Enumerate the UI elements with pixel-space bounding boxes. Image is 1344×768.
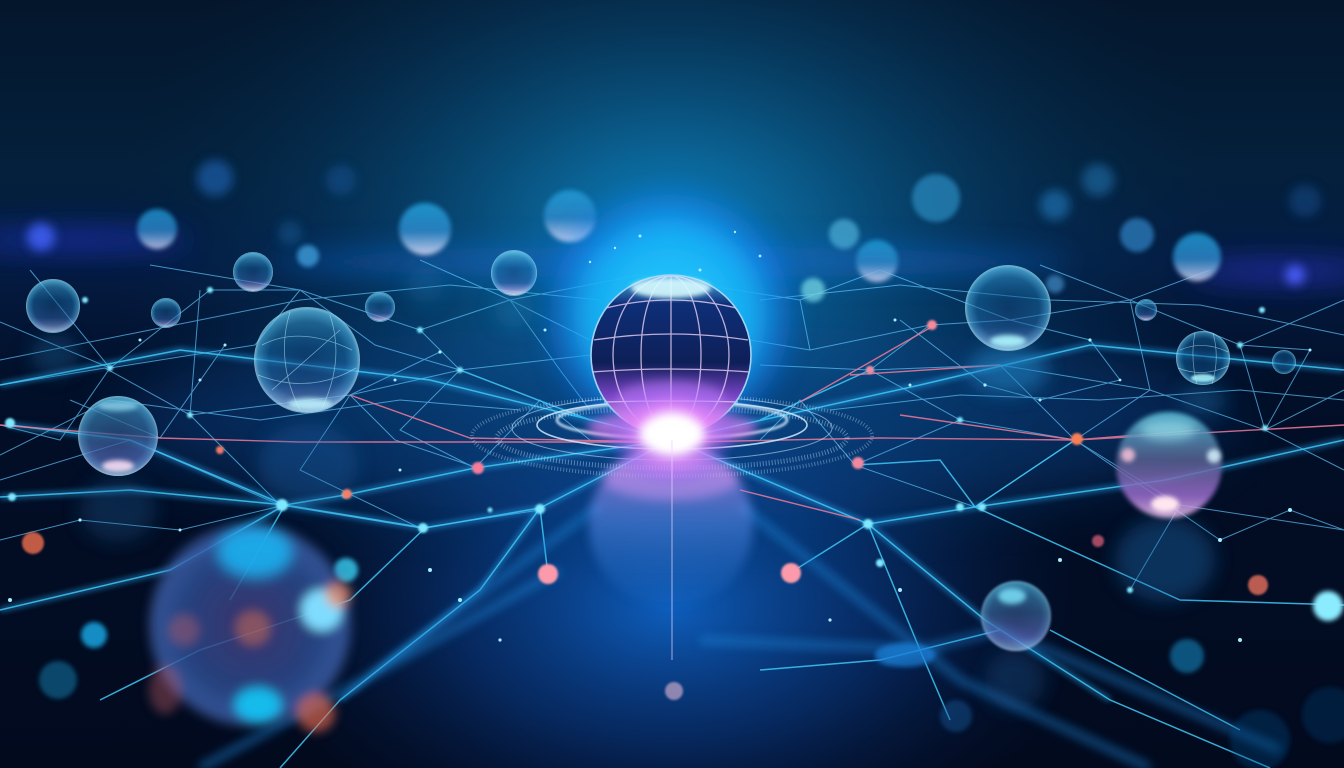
- central sphere halo: [535, 180, 805, 450]
- sphere: right pink large: [1116, 412, 1222, 518]
- sphere: left pink-tinted: [78, 396, 158, 476]
- scattered sparkles: [8, 231, 1312, 642]
- globe reflection: [589, 443, 753, 607]
- central light burst: [587, 380, 757, 660]
- network lines: dim back web: [0, 260, 1344, 590]
- network nodes: pink and orange: [22, 320, 1268, 700]
- network lines: pink energy ring lines: [0, 325, 1344, 520]
- sphere: small glass group left: [26, 250, 537, 333]
- sphere: right large glass: [965, 265, 1051, 351]
- central energy rings: [472, 396, 872, 476]
- central globe: [591, 275, 751, 435]
- network nodes: blurred foreground: [39, 558, 1344, 768]
- large out-of-focus foreground sphere: [148, 523, 352, 732]
- distant blurred spheres: [27, 160, 1321, 285]
- network lines: blurred foreground beams: [200, 505, 1280, 768]
- mid-distance soft spheres: [137, 174, 1221, 302]
- network nodes: cyan: [5, 287, 1268, 593]
- network lines: soft glow behind bright web: [0, 345, 1344, 700]
- sphere: lower right: [981, 581, 1051, 651]
- sphere reflections on the floor: [31, 267, 1227, 710]
- horizon purple glow bands: [0, 232, 1344, 280]
- sphere: right small glass group: [1135, 299, 1296, 385]
- sphere: large glass left: [254, 307, 360, 413]
- network lines: bright front web: [0, 345, 1344, 768]
